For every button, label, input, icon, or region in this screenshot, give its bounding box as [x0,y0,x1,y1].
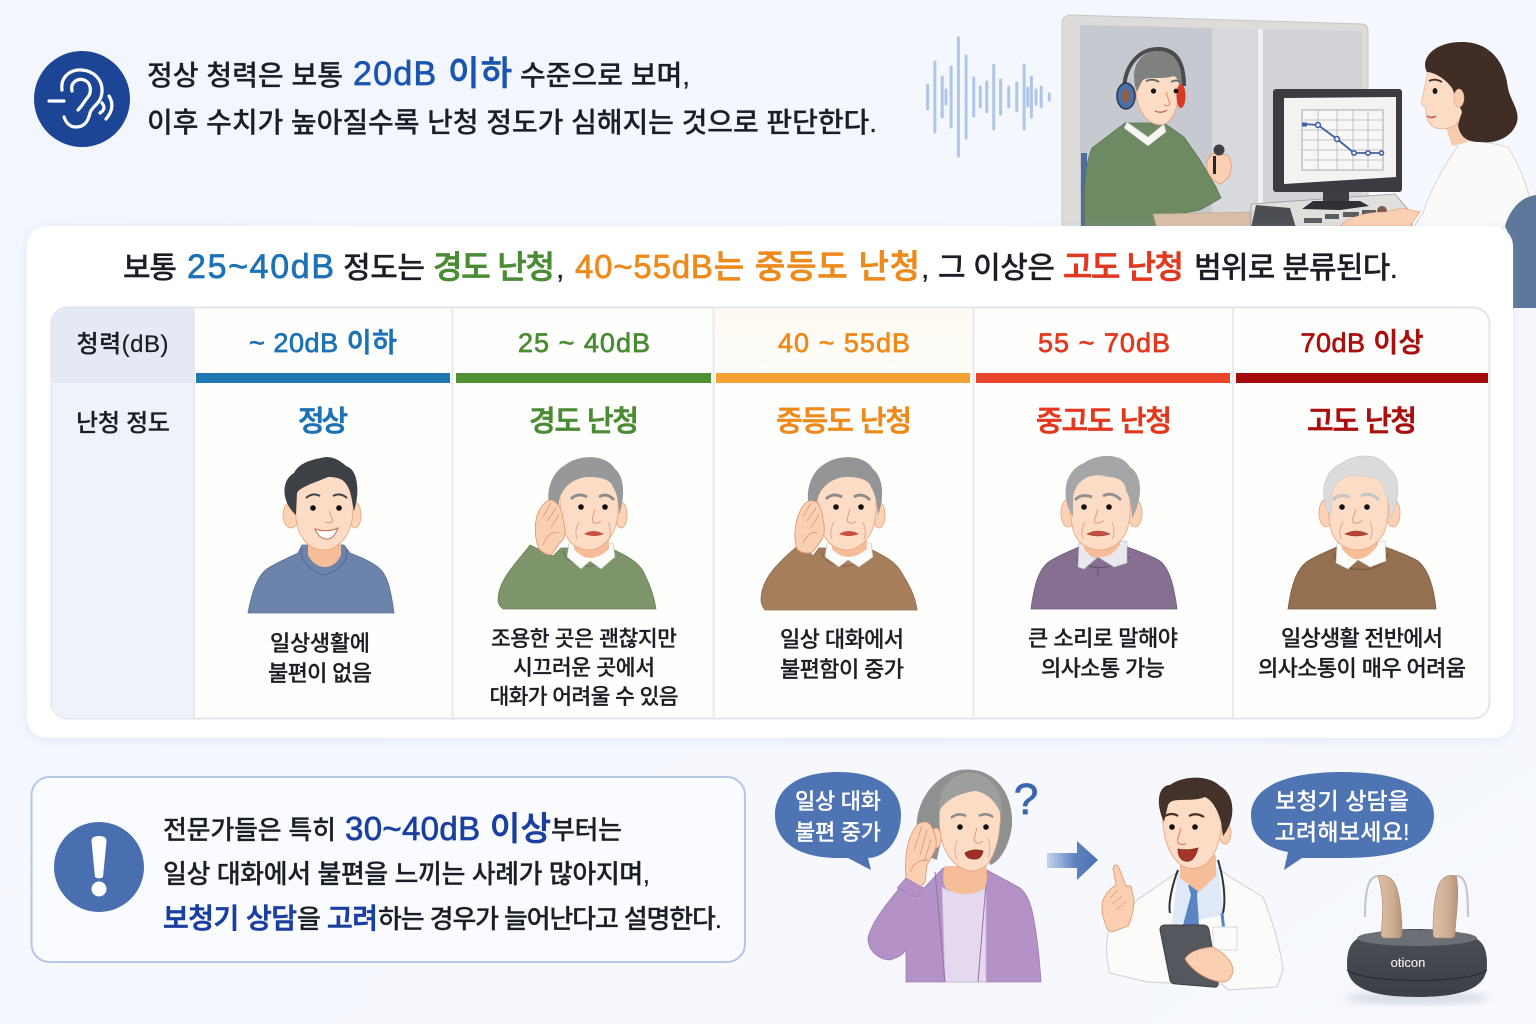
icon: sound waveform [928,38,1049,156]
callout text: 을 [297,904,321,934]
heading: classification sentence [123,248,1398,286]
callout text: 30~40dB 이상 [345,810,551,847]
illustration: hearing aids on charger [1345,875,1489,1004]
column: 55-70dB moderately severe: 55 ~ 70dB [1038,328,1170,358]
arrow [1047,841,1098,880]
column: 20dB normal: ~ 20dB 이하 [249,328,397,358]
heading: classification sentence: 고도 난청 [1063,249,1184,285]
table row label column [52,308,193,718]
audiogram chart [1302,110,1384,170]
callout text: 보청기 상담 [163,903,297,934]
column: 70dB severe: 의사소통이 매우 어려움 [1258,656,1466,681]
column: 25-40dB mild: 조용한 곳은 괜찮지만 [491,627,677,651]
left hearing aid [1378,875,1402,938]
column: 70dB severe: 일상생활 전반에서 [1281,626,1443,651]
icon: exclamation mark [54,822,144,912]
column: 70dB severe [1236,328,1488,681]
column: 20dB normal: 일상생활에 [270,631,370,656]
intro text: 이후 수치가 높아질수록 난청 정도가 심해지는 것으로 판단한다. [147,107,877,138]
callout text: 하는 경우가 늘어난다고 설명한다. [378,904,722,934]
column: 20dB normal: 불편이 없음 [268,661,372,686]
table frame [52,308,1490,718]
heading: classification sentence: , [921,252,929,285]
column: 55-70dB moderately severe: 큰 소리로 말해야 [1028,626,1178,651]
speech bubble: patient: 불편 중가 [795,820,881,845]
speech bubble: doctor: 고려해보세요! [1274,819,1410,845]
console [1251,194,1412,228]
callout text: 전문가들은 특히 [163,815,336,845]
illustration: hearing test booth [1062,15,1368,228]
illustration: audiologist [1340,42,1536,228]
speech bubble: doctor [1251,772,1434,870]
column: 40-55dB moderate: 일상 대화에서 [780,627,904,652]
person: moderate hearing loss [761,457,917,610]
column: 55-70dB moderately severe: 의사소통 가능 [1041,656,1165,681]
booth window [1080,25,1362,228]
column: 25-40dB mild: 시끄러운 곳에서 [513,656,655,680]
column: 25-40dB mild: 대화가 어려울 수 있음 [490,685,678,709]
heading: classification sentence: 경도 난청 [433,249,555,285]
person: severe hearing loss [1288,456,1436,609]
heading: classification sentence: 그 이상은 [938,252,1055,285]
callout text: 고려 [327,903,378,934]
speech bubble: doctor: 보청기 상담을 [1275,788,1409,814]
column: 40-55dB moderate: 불편함이 중가 [780,657,904,682]
callout text [163,810,722,934]
speech bubble: patient: 일상 대화 [795,789,881,814]
column: 55-70dB moderately severe [976,328,1230,681]
illustration: audiometer monitor and console [1251,89,1412,228]
illustration: doctor [1102,778,1283,990]
panel: hearing level table card [27,226,1513,738]
heading: classification sentence: 40~55dB는 중등도 난청 [575,248,920,285]
chair back [1505,195,1536,308]
heading: classification sentence: 25~40dB [187,248,334,286]
column: 70dB severe: 고도 난청 [1307,406,1417,438]
person: moderately severe hearing loss [1031,456,1177,609]
heading: classification sentence: 정도는 [343,252,425,285]
column: 25-40dB mild [456,328,711,709]
intro text: 20dB 이하 [353,55,512,93]
column: 55-70dB moderately severe: 중고도 난청 [1036,406,1172,438]
right hearing aid [1433,875,1458,938]
intro text: 수준으로 보며, [520,60,690,91]
column: 70dB severe: 70dB 이상 [1300,328,1424,358]
heading: classification sentence: 보통 [123,252,177,285]
heading: classification sentence: 범위로 분류된다. [1194,252,1398,285]
column: 40-55dB moderate: 40 ~ 55dB [778,328,910,358]
brand label: oticon [1391,955,1425,970]
column: 40-55dB moderate: 중등도 난청 [776,406,912,438]
monitor [1323,190,1349,202]
speech bubble: patient [775,772,901,870]
column: 25-40dB mild: 경도 난청 [529,405,639,438]
callout text: 일상 대화에서 불편을 느끼는 사례가 많아지며, [163,859,650,889]
panel: expert advice callout [32,777,745,962]
column: 20dB normal [196,328,450,686]
illustration: elderly woman cupping ear [868,769,1041,982]
table row label column: 청력(dB) [76,331,168,358]
callout text: 부터는 [551,815,622,845]
icon: ear in blue circle [34,51,130,147]
column: 20dB normal: 정상 [298,406,348,438]
table row label column: 난청 정도 [76,410,170,437]
intro text: 정상 청력은 보통 [147,60,343,91]
patient in booth [1081,49,1251,228]
column: 25-40dB mild: 25 ~ 40dB [518,328,650,358]
heading: classification sentence: , [556,252,564,285]
booth frame [1062,15,1368,228]
person: normal hearing [248,457,394,613]
person: mild hearing loss [498,457,656,609]
intro text [147,55,877,138]
column: 40-55dB moderate [716,328,970,682]
question mark: ? [1014,775,1038,824]
